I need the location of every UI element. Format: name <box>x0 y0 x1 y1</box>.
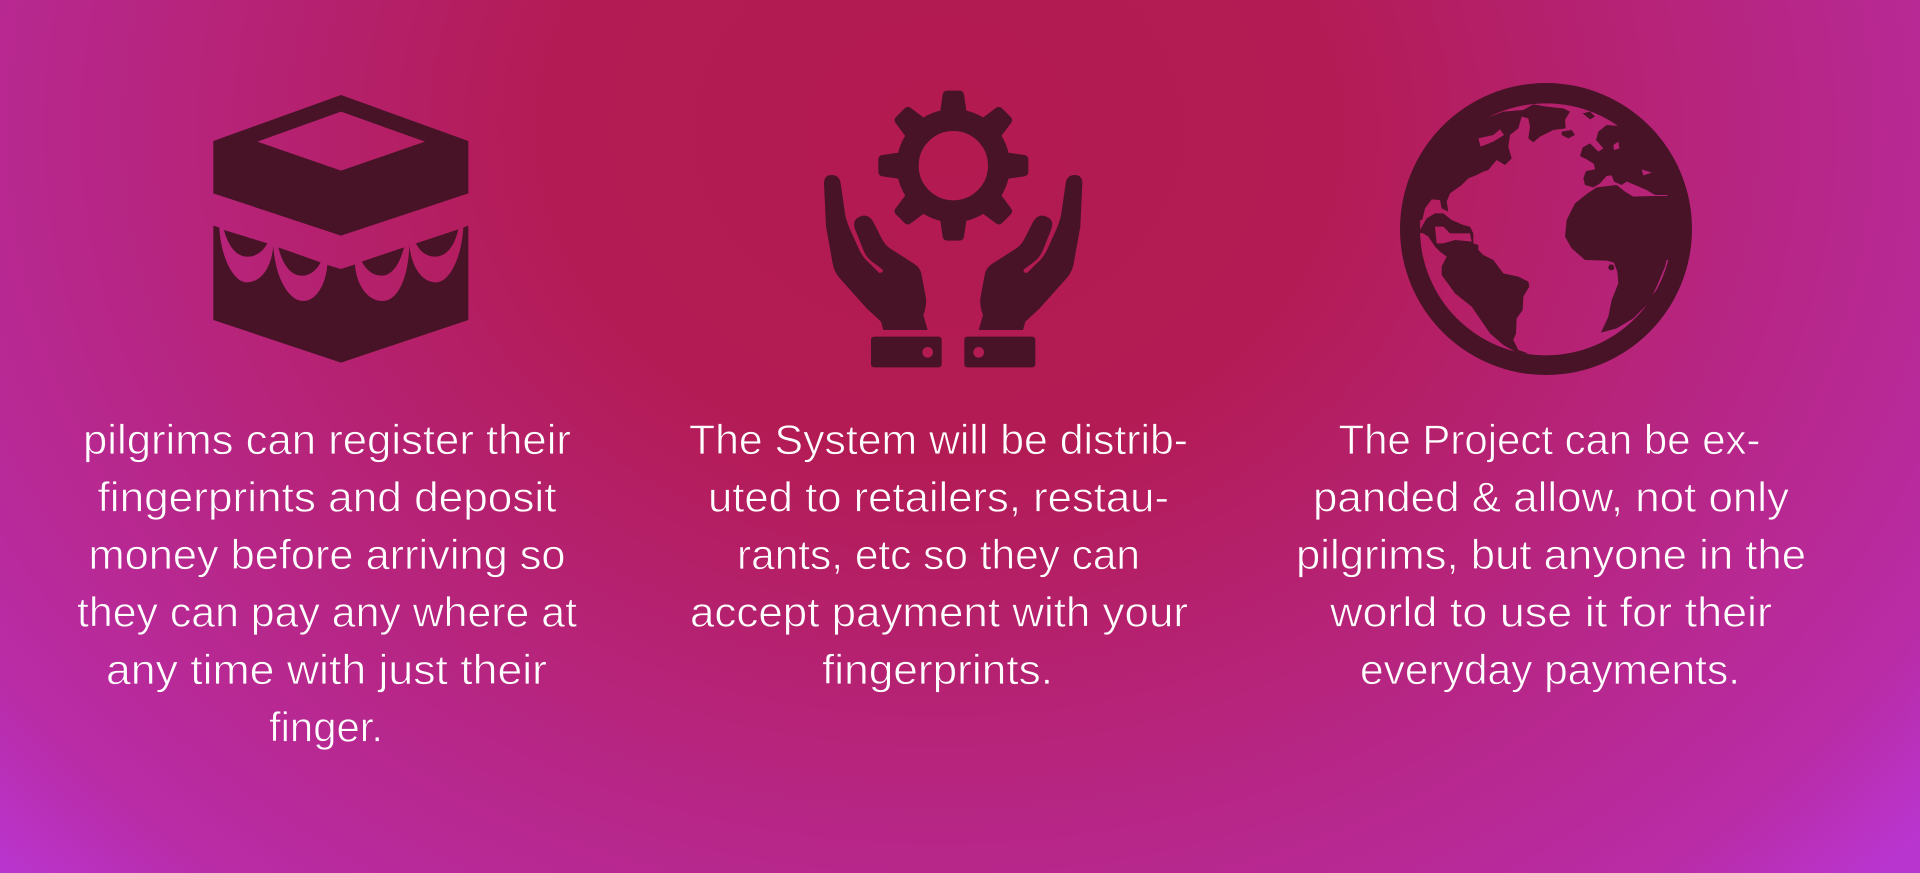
text: pilgrims description: pilgrims can register their <box>83 416 571 463</box>
icon: globe <box>1400 83 1692 375</box>
text: system description: fingerprints. <box>822 646 1053 693</box>
text: project description: panded & allow, not only <box>1313 474 1789 520</box>
text: pilgrims description: any time with just their <box>106 646 547 693</box>
text: system description: uted to retailers, restau- <box>708 474 1169 520</box>
text: pilgrims description: they can pay any where at <box>77 588 577 636</box>
icon: kaaba <box>213 95 468 363</box>
text: project description: pilgrims, but anyone in the <box>1296 531 1806 578</box>
text: pilgrims description <box>77 416 577 750</box>
text: project description <box>1296 416 1806 693</box>
text: project description: everyday payments. <box>1360 646 1740 693</box>
text: pilgrims description: fingerprints and deposit <box>98 474 557 520</box>
panel: project <box>1296 83 1806 693</box>
text: system description: rants, etc so they can <box>737 531 1140 578</box>
panel: system <box>689 91 1188 693</box>
text: pilgrims description: money before arriving so <box>88 531 566 578</box>
text: system description <box>689 416 1188 693</box>
text: project description: world to use it for their <box>1329 588 1772 636</box>
text: system description: The System will be distrib- <box>689 416 1188 463</box>
icon: hands holding gear <box>824 91 1082 367</box>
text: pilgrims description: finger. <box>269 704 383 750</box>
text: system description: accept payment with your <box>690 588 1188 636</box>
panel: pilgrims <box>77 95 577 750</box>
text: project description: The Project can be ex- <box>1338 416 1760 463</box>
